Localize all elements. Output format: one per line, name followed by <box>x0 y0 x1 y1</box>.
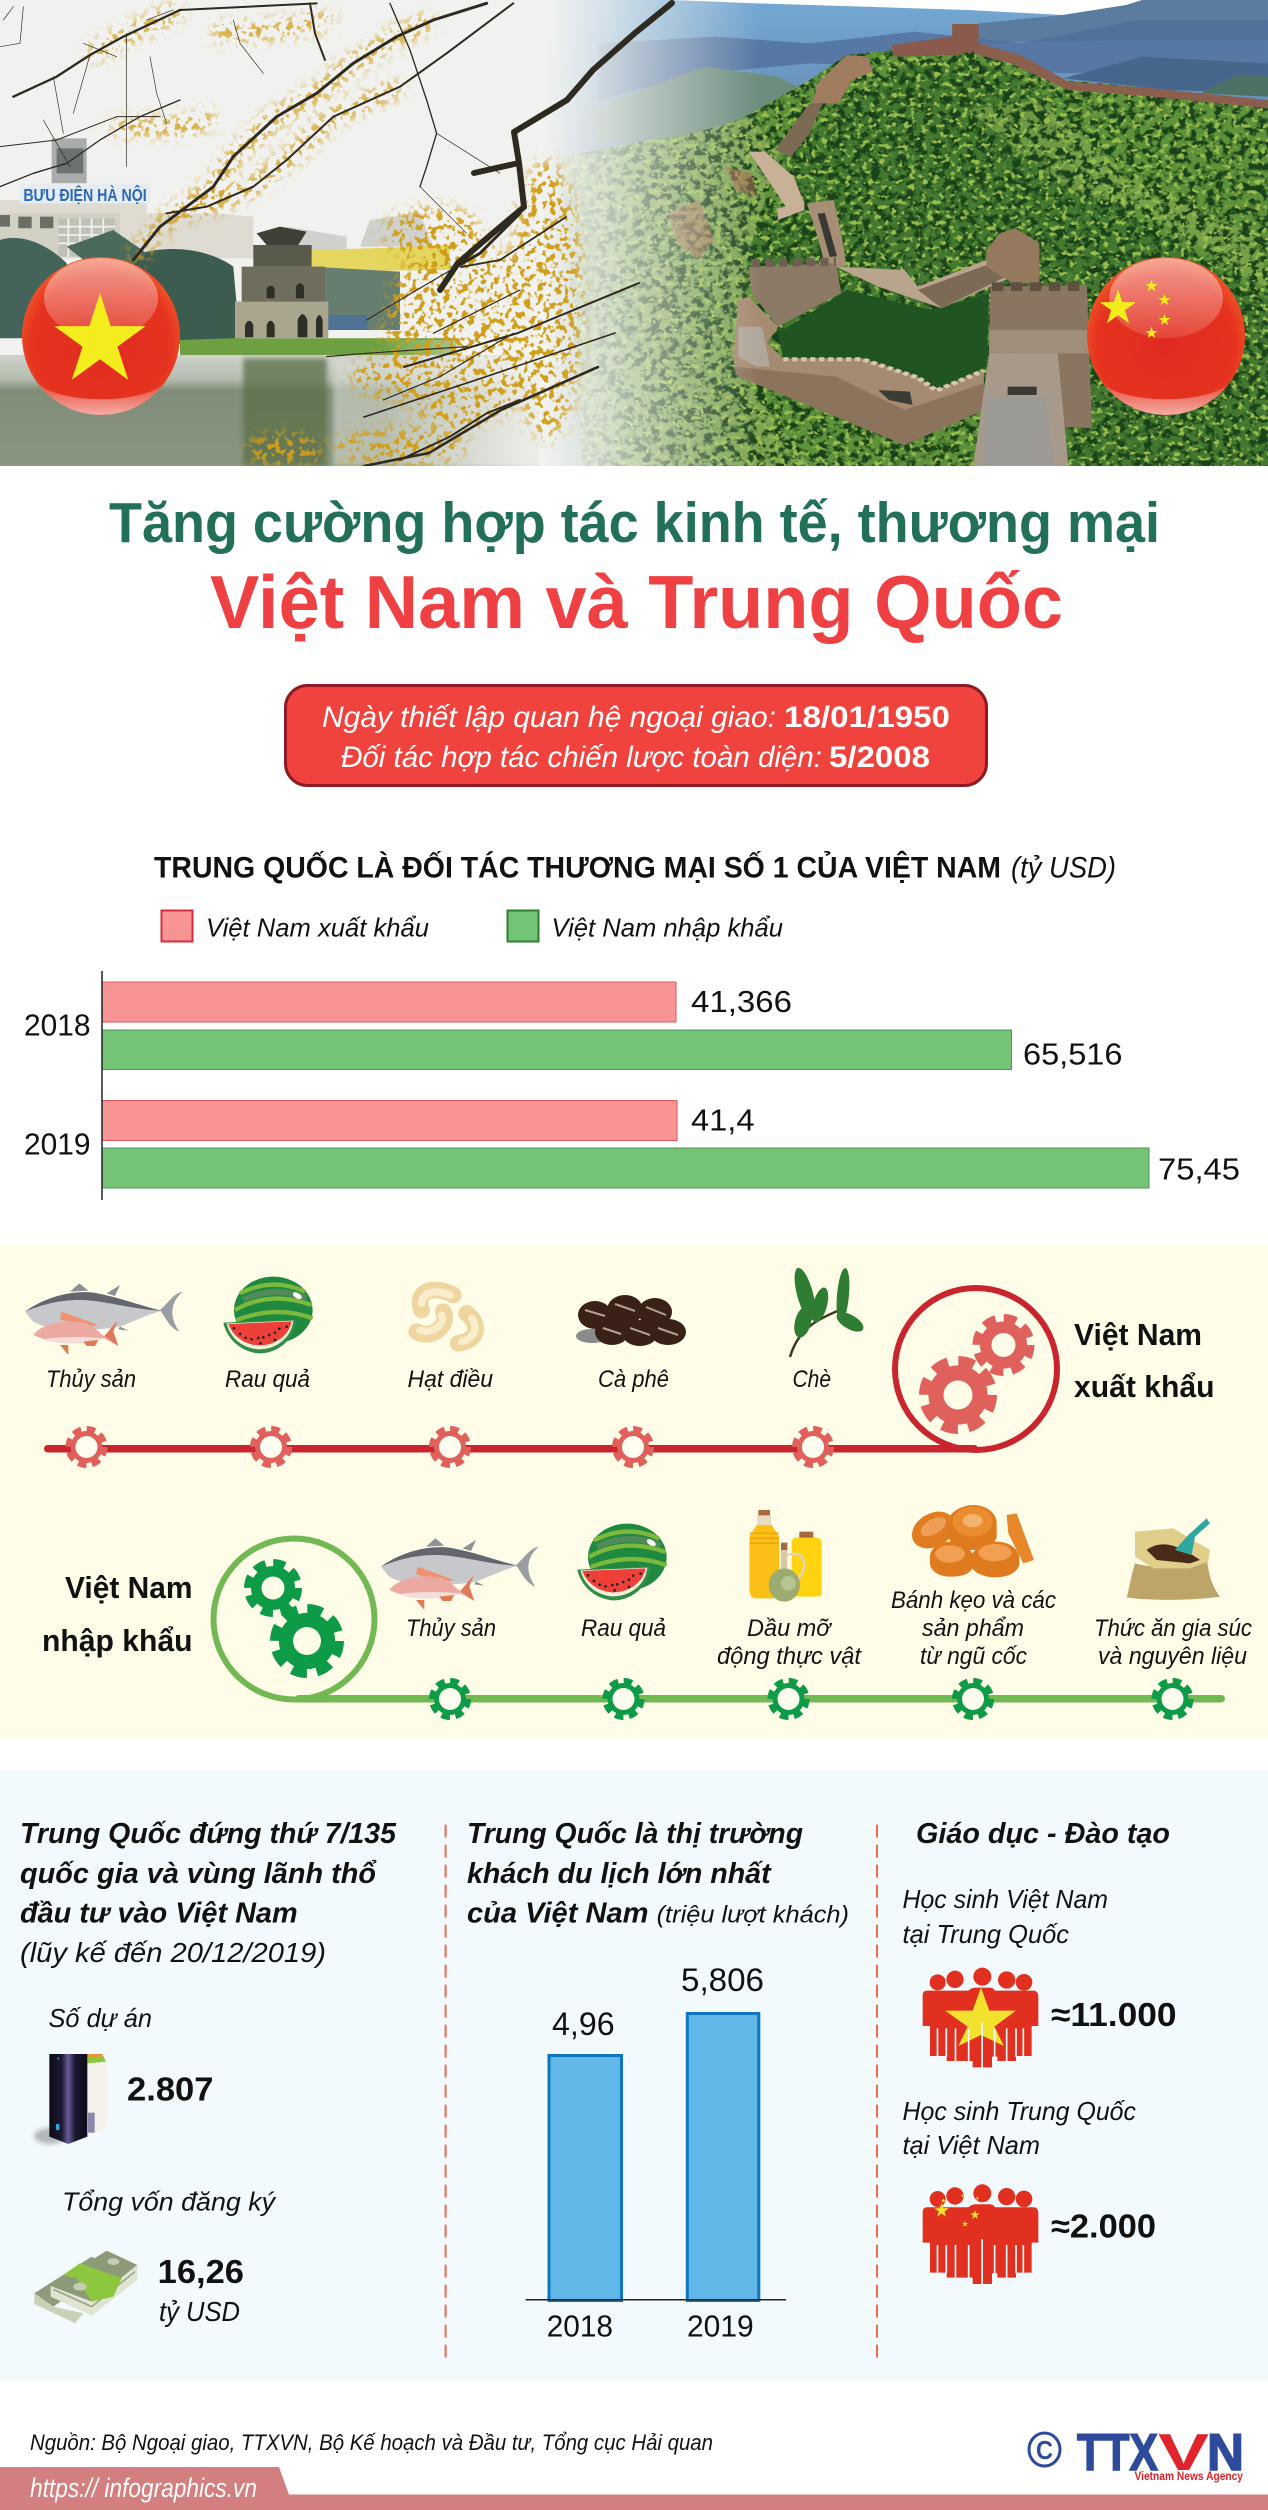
icon: pastries <box>905 1504 1034 1577</box>
labels: import goods: Dầu mỡ <box>747 1615 833 1642</box>
icon: export gears in circle <box>895 1288 1057 1450</box>
labels: export goods: Thủy sản <box>46 1366 136 1393</box>
icon: crowd with Vietnam flag <box>923 1968 1038 2068</box>
labels: export goods: Rau quả <box>225 1366 310 1393</box>
icon: coffee beans <box>576 1295 686 1346</box>
label: Vietnamese students <box>902 1884 1108 1949</box>
bar chart: trade: 41,366 <box>691 984 792 1019</box>
icon: tea leaves <box>790 1266 866 1357</box>
bar chart: trade: 2018 <box>24 1008 90 1042</box>
logo: TTXVN <box>1029 2424 1244 2483</box>
label: Vietnamese students: Học sinh Việt Nam <box>902 1884 1108 1914</box>
bar chart: trade: 65,516 <box>1023 1037 1122 1072</box>
heading: tourism: của Việt Nam <box>467 1898 648 1930</box>
wall ridge <box>973 43 1268 108</box>
icon: Turtle Tower <box>235 227 328 338</box>
footer: url bar <box>0 2467 1268 2510</box>
heading: tourism: (triệu lượt khách) <box>657 1902 849 1929</box>
icon: crowd with China flag <box>923 2184 1038 2285</box>
stat: registered capital: 16,26 <box>158 2253 244 2290</box>
stat: number of projects: Số dự án <box>48 2003 152 2033</box>
icon: watermelon (import) <box>577 1524 667 1600</box>
photo banner: Hanoi and the Great Wall <box>0 0 1268 467</box>
legend: Việt Nam nhập khẩu <box>552 913 783 943</box>
icon: China flag ball <box>1087 257 1245 415</box>
photo: Hoan Kiem lake scene <box>0 138 560 466</box>
bar chart: trade: 2019 <box>24 1127 90 1162</box>
heading: tourism <box>467 1818 849 1930</box>
heading: investment: (lũy kế đến 20/12/2019) <box>20 1937 326 1968</box>
stat: Vietnamese students count: ≈11.000 <box>1051 1996 1177 2033</box>
heading: trade chart: (tỷ USD) <box>1011 852 1116 884</box>
bar chart: trade: 75,45 <box>1158 1152 1240 1186</box>
heading: trade chart: TRUNG QUỐC LÀ ĐỐI TÁC THƯƠNG MẠI SỐ 1 CỦA VIỆT NAM <box>154 850 1001 884</box>
legend <box>162 910 783 943</box>
stat: number of projects <box>34 2003 214 2144</box>
photo: Great Wall mountains <box>540 0 1268 466</box>
footer: source: Nguồn: Bộ Ngoại giao, TTXVN, Bộ Kế hoạch và Đầu tư, Tổng cục Hải quan <box>30 2430 713 2455</box>
bar chart: tourists: 5,806 <box>681 1962 764 1998</box>
label: Vietnam imports: nhập khẩu <box>42 1623 192 1658</box>
sign: post office: BƯU ĐIỆN HÀ NỘI <box>23 184 147 205</box>
label: Vietnam exports: xuất khẩu <box>1074 1369 1214 1404</box>
logo: TTXVN: V <box>1158 2424 1209 2482</box>
icon: feed sack <box>1127 1518 1220 1600</box>
icon: oil bottles <box>749 1510 822 1602</box>
stat: registered capital: Tổng vốn đăng ký <box>62 2187 277 2217</box>
icon: cashew <box>417 1290 476 1343</box>
icon: fish (export) <box>25 1283 183 1355</box>
labels: import goods: và nguyên liệu <box>1098 1643 1247 1670</box>
photo: yellow leaves on branches <box>90 10 583 467</box>
labels: import goods: Bánh kẹo và các <box>891 1587 1056 1614</box>
stat: Chinese students count: ≈2.000 <box>1051 2208 1156 2244</box>
panel: exports and imports <box>0 1245 1268 1739</box>
footer: url bar: https:// infographics.vn <box>30 2473 257 2503</box>
callout: diplomatic dates: 5/2008 <box>829 741 930 774</box>
export timeline gears <box>69 1429 831 1465</box>
export timeline line <box>44 1445 978 1452</box>
bar chart: tourists: 2018 <box>547 2309 613 2344</box>
heading: tourism: Trung Quốc là thị trường <box>467 1818 803 1850</box>
panel: investment, tourism, education <box>0 1770 1268 2381</box>
label: Chinese students <box>902 2096 1136 2160</box>
legend: Việt Nam xuất khẩu <box>206 913 429 943</box>
stat: registered capital <box>34 2187 277 2327</box>
labels: import goods: Rau quả <box>581 1615 666 1642</box>
heading: education: Giáo dục - Đào tạo <box>916 1818 1170 1850</box>
labels: import goods: Thủy sản <box>406 1615 496 1642</box>
logo: TTXVN: Vietnam News Agency <box>1134 2469 1243 2483</box>
bar chart: trade: 41,4 <box>691 1102 754 1138</box>
labels: import goods: Thức ăn gia súc <box>1094 1615 1252 1642</box>
heading: investment: đầu tư vào Việt Nam <box>20 1898 298 1930</box>
label: Vietnam imports <box>42 1570 192 1658</box>
title: Việt Nam và Trung Quốc <box>210 560 1063 644</box>
icon: Vietnam flag ball <box>22 257 180 415</box>
labels: export goods: Chè <box>792 1366 831 1393</box>
heading: investment <box>20 1818 397 1968</box>
bar chart: tourists <box>526 1962 786 2344</box>
bar chart: tourists: 2019 <box>687 2309 754 2344</box>
label: Vietnamese students: tại Trung Quốc <box>902 1919 1069 1949</box>
import timeline line <box>295 1695 1225 1702</box>
labels: import goods: động thực vật <box>717 1643 862 1670</box>
icon: watermelon (export) <box>223 1277 313 1353</box>
label: Chinese students: tại Việt Nam <box>902 2130 1040 2160</box>
icon: server <box>34 2054 107 2144</box>
label: Chinese students: Học sinh Trung Quốc <box>902 2096 1136 2126</box>
labels: import goods <box>406 1587 1252 1670</box>
labels: export goods: Cà phê <box>598 1366 669 1393</box>
heading: tourism: khách du lịch lớn nhất <box>467 1858 772 1890</box>
bar chart: trade <box>24 971 1240 1200</box>
labels: export goods: Hạt điều <box>408 1366 493 1393</box>
label: Vietnam imports: Việt Nam <box>65 1570 192 1605</box>
stat: number of projects: 2.807 <box>127 2071 214 2108</box>
label: Vietnam exports: Việt Nam <box>1074 1317 1202 1352</box>
bar chart: tourists: 4,96 <box>552 2006 615 2042</box>
callout: diplomatic dates: Đối tác hợp tác chiến lược toàn diện: <box>341 741 822 774</box>
heading: investment: quốc gia và vùng lãnh thổ <box>20 1858 377 1890</box>
callout: diplomatic dates: 18/01/1950 <box>784 701 950 734</box>
photo: tree branches <box>0 3 672 466</box>
logo: TTXVN: TTX <box>1077 2424 1158 2482</box>
labels: import goods: từ ngũ cốc <box>920 1643 1027 1670</box>
icon: money stack <box>34 2251 137 2323</box>
callout: diplomatic dates <box>286 686 986 786</box>
icon: fish (import) <box>381 1538 539 1610</box>
heading: investment: Trung Quốc đứng thứ 7/135 <box>20 1818 397 1850</box>
logo: TTXVN: N <box>1207 2424 1244 2482</box>
title <box>109 491 1160 644</box>
callout: diplomatic dates: Ngày thiết lập quan hệ ngoại giao: <box>322 701 776 734</box>
labels: export goods <box>46 1366 831 1393</box>
stat: registered capital: tỷ USD <box>159 2296 240 2327</box>
title: Tăng cường hợp tác kinh tế, thương mại <box>109 491 1160 555</box>
label: Vietnam exports <box>1074 1317 1214 1404</box>
labels: import goods: sản phẩm <box>922 1615 1024 1642</box>
logo: TTXVN: C <box>1036 2435 1053 2465</box>
import timeline gears <box>432 1681 1190 1717</box>
icon: import gears in circle <box>214 1538 374 1700</box>
